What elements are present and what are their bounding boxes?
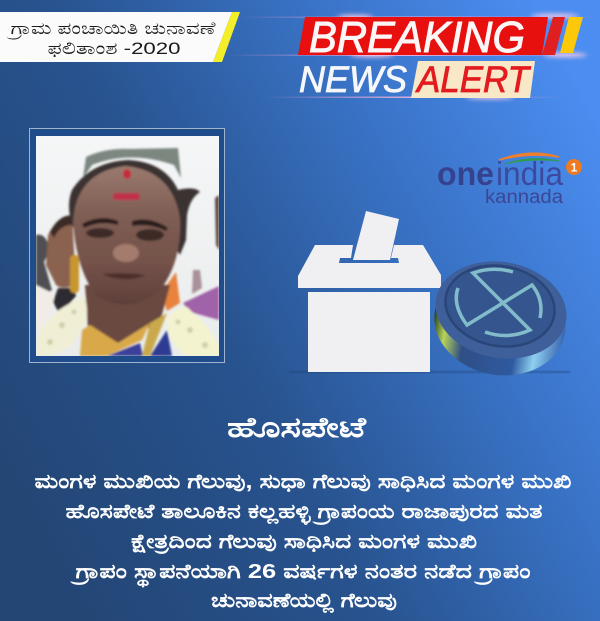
alert text: ALERT bbox=[415, 59, 531, 100]
body text: ಹೊಸಪೇಟೆ ತಾಲೂಕಿನ ಕಲ್ಲಹಳ್ಳಿ ಗ್ರಾಪಂಯ ರಾಜಾಪುರದ ಮತ bbox=[66, 501, 543, 526]
banner text: ಗ್ರಾಮ ಪಂಚಾಯಿತಿ ಚುನಾವಣೆ bbox=[7, 19, 216, 40]
box body bbox=[308, 292, 430, 372]
body text bbox=[34, 471, 572, 614]
body text: ಗ್ರಾಪಂ ಸ್ಥಾಪನೆಯಾಗಿ 26 ವರ್ಷಗಳ ನಂತರ ನಡೆದ ಗ್ರಾಪಂ bbox=[70, 561, 531, 589]
banner text bbox=[7, 19, 216, 58]
yellow stripe bbox=[560, 17, 583, 53]
box lid bbox=[298, 245, 441, 288]
ballot paper bbox=[353, 211, 399, 260]
stamp edge bbox=[426, 258, 574, 386]
earrings bbox=[70, 255, 79, 293]
white panel bbox=[0, 12, 232, 62]
breaking text: BREAKING bbox=[309, 13, 525, 62]
red banner bbox=[298, 17, 548, 55]
neck and chest bbox=[85, 285, 170, 343]
ground shadow bbox=[290, 371, 570, 373]
breaking news alert logo bbox=[298, 13, 583, 100]
candidate photo bbox=[36, 136, 219, 356]
face bbox=[73, 166, 180, 305]
yellow stripe bbox=[213, 12, 240, 62]
india wordmark: india bbox=[496, 155, 564, 192]
tricolor arc bbox=[499, 153, 559, 160]
stamp inner ring bbox=[439, 257, 561, 355]
body text: ಚುನಾವಣೆಯಲ್ಲಿ ಗೆಲುವು bbox=[211, 590, 397, 614]
banner: election results label bbox=[0, 12, 240, 62]
kannada wordmark: kannada bbox=[485, 187, 563, 208]
icon: ballot box bbox=[298, 211, 441, 372]
background people bbox=[36, 235, 52, 300]
news text: NEWS bbox=[299, 59, 407, 100]
bindi marks bbox=[123, 169, 131, 179]
icon: ballot stamp bbox=[426, 251, 574, 386]
oneindia kannada logo bbox=[437, 153, 582, 208]
flower garland bbox=[37, 295, 87, 356]
body text: ಮಂಗಳ ಮುಖಿಯ ಗೆಲುವು, ಸುಧಾ ಗೆಲುವು ಸಾಧಿಸಿದ ಮಂಗಳ ಮುಖಿ bbox=[34, 471, 572, 493]
banner text: ಫಲಿತಾಂಶ -2020 bbox=[48, 39, 180, 58]
stamp mark bbox=[456, 269, 541, 336]
flare lines bbox=[225, 14, 600, 99]
stamp face bbox=[428, 251, 574, 369]
photo frame bbox=[30, 128, 224, 362]
hair bbox=[69, 160, 200, 255]
heading: ಹೊಸಪೇಟೆ bbox=[227, 412, 367, 443]
sunglasses bbox=[83, 148, 181, 178]
one wordmark: one bbox=[437, 155, 494, 192]
nose and mouth bbox=[113, 244, 139, 262]
red stripe bbox=[542, 17, 565, 55]
oneindia kannada logo: 1 bbox=[571, 160, 578, 174]
body text: ಕ್ಷೇತ್ರದಿಂದ ಗೆಲುವು ಸಾಧಿಸಿದ ಮಂಗಳ ಮುಖಿ bbox=[131, 531, 477, 555]
badge bbox=[566, 159, 582, 175]
alert tag bbox=[411, 61, 535, 98]
eyebrows and eyes bbox=[82, 218, 118, 228]
blouse bbox=[80, 323, 150, 356]
